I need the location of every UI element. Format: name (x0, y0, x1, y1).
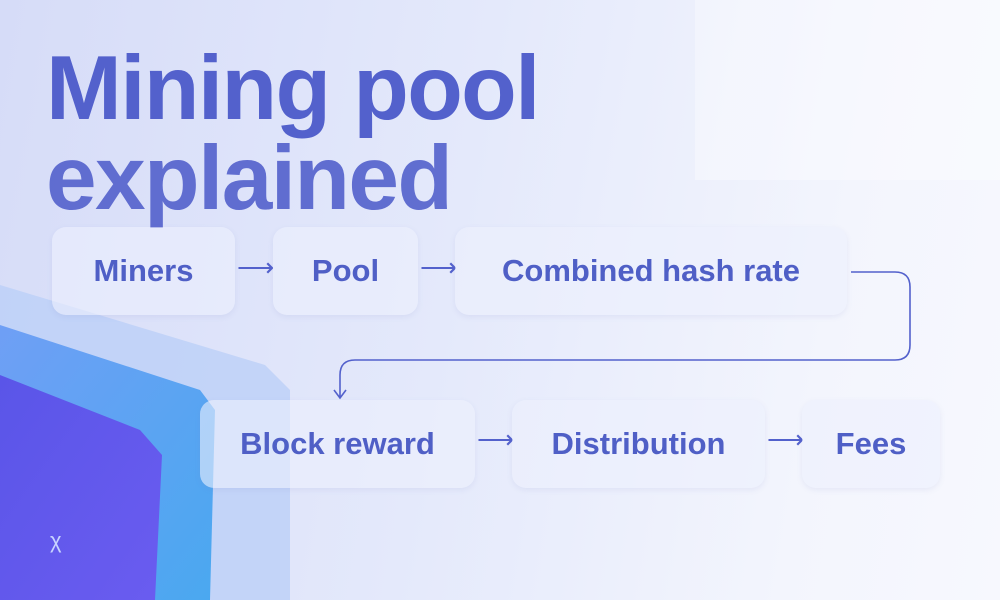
title: Mining pool (46, 38, 539, 139)
box: Miners (52, 227, 235, 315)
box: Block reward (200, 400, 475, 488)
arrow: ⟶ (477, 424, 514, 454)
box: Block reward: Block reward (240, 426, 435, 461)
arrow: ⟶ (420, 252, 457, 282)
box: Combined hash rate (455, 227, 847, 315)
box: Distribution (512, 400, 765, 488)
box: Fees: Fees (836, 426, 906, 461)
arrow: ⟶ (767, 424, 804, 454)
icon: logo: χ (50, 528, 62, 553)
title line 2: explained (46, 128, 451, 229)
box: Fees (802, 400, 940, 488)
box: Pool (273, 227, 418, 315)
glass object (0, 285, 290, 600)
box: Distribution: Distribution (552, 426, 725, 461)
arrow: ⟶ (237, 252, 274, 282)
box: Pool: Pool (312, 253, 379, 288)
box: Combined hash rate: Combined hash rate (502, 253, 800, 288)
background squares (695, 0, 1000, 180)
box: Miners: Miners (94, 253, 193, 288)
